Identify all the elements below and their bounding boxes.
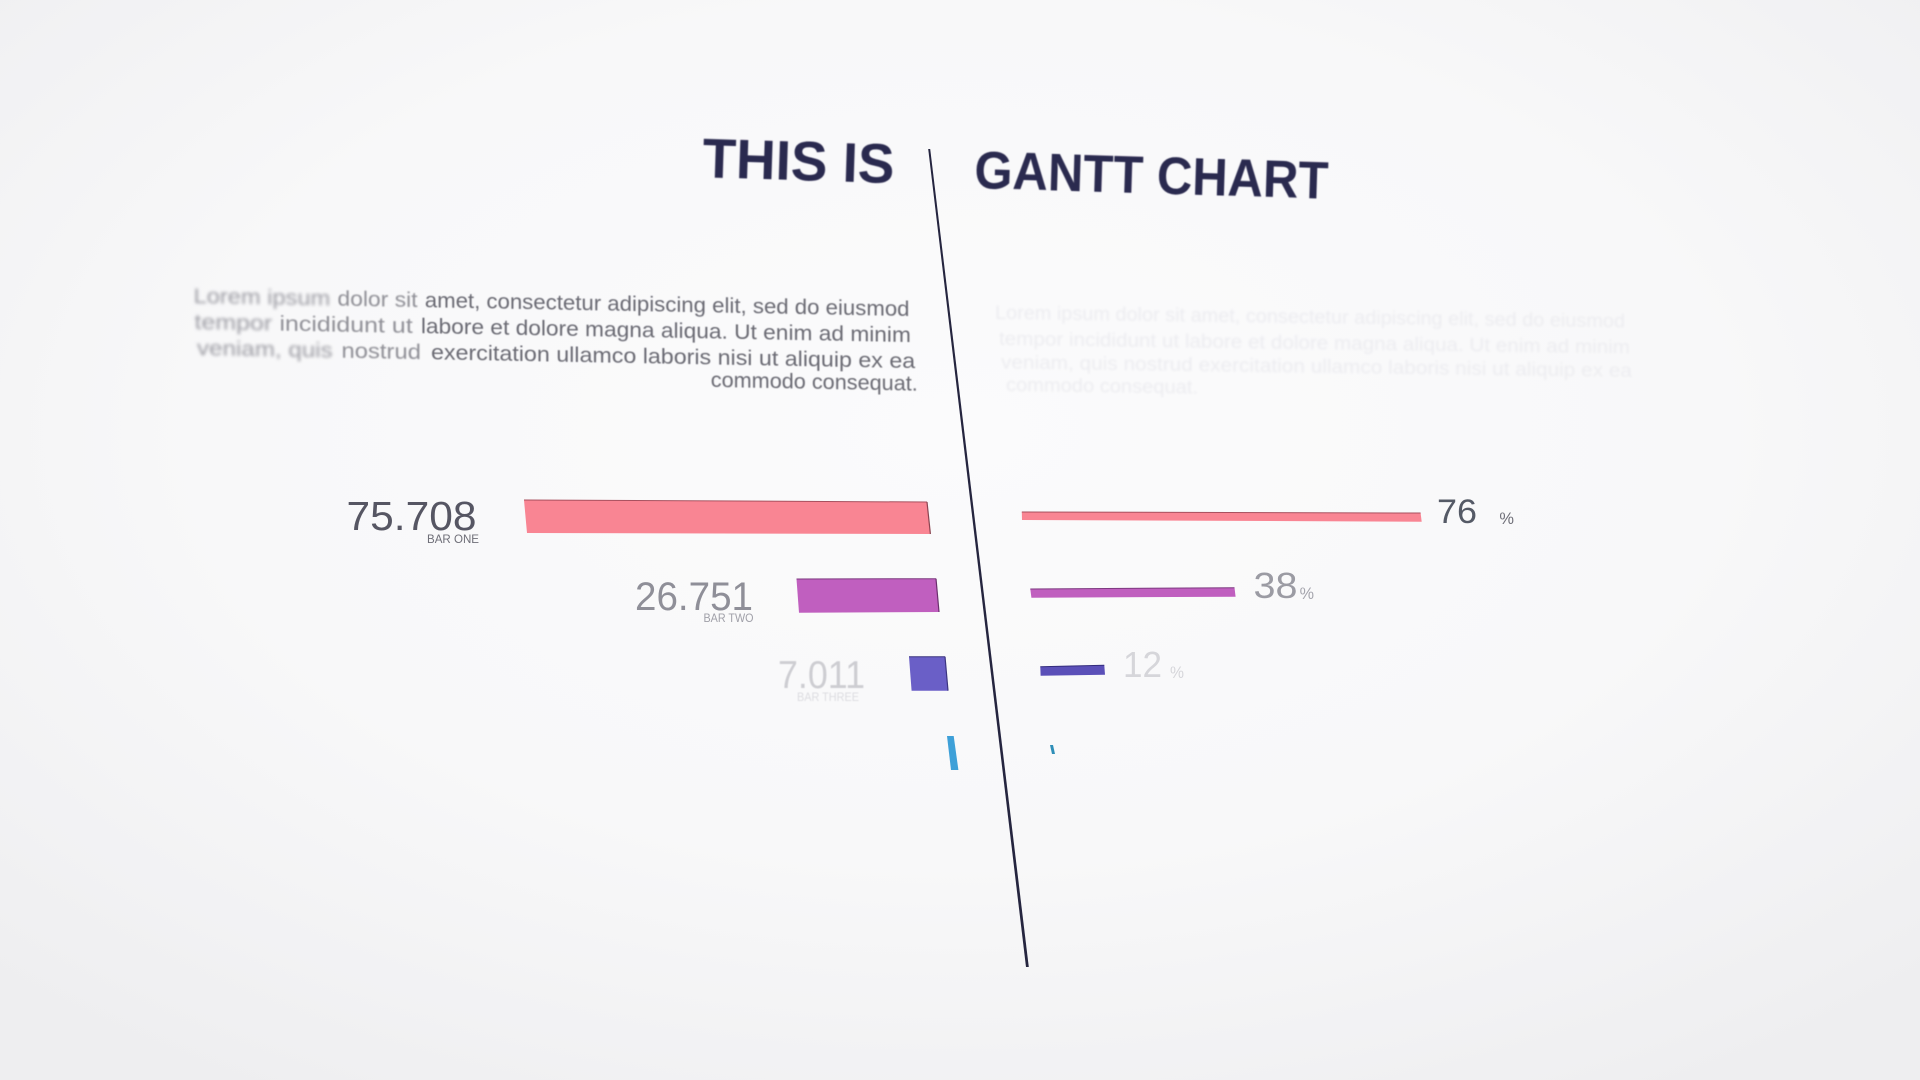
value: 12 percent: 12 [1123, 644, 1162, 685]
label: 7.011 bar three: BAR THREE [797, 690, 859, 704]
label: 7.011 bar three: 7.011 [778, 654, 865, 697]
right bar three [1040, 665, 1105, 676]
value: 12 percent: % [1170, 663, 1184, 682]
paragraph: left description: dolor sit [338, 288, 418, 312]
value: 38 percent: 38 [1254, 565, 1298, 606]
paragraph: right ghost description: veniam, quis nostrud exercitation ullamco laboris nisi ut aliquip ex ea [1001, 353, 1632, 382]
paragraph: left description: incididunt ut [279, 313, 413, 338]
paragraph: right ghost description: commodo consequat. [1006, 375, 1198, 399]
paragraph: left description: amet, consectetur adipiscing elit, sed do eiusmod [425, 289, 909, 321]
left bar one [524, 500, 930, 534]
value: 12 percent [1123, 644, 1184, 685]
label: 26.751 bar two: 26.751 [635, 575, 753, 619]
paragraph: left description: nostrud [341, 340, 421, 364]
paragraph: left description: labore et dolore magna aliqua. Ut enim ad minim [421, 315, 911, 347]
value: 76 percent: % [1499, 509, 1514, 528]
value: 76 percent [1437, 493, 1514, 531]
right bar four [1050, 745, 1055, 754]
right bar two [1030, 588, 1236, 598]
paragraph: right ghost description: tempor incididunt ut labore et dolore magna aliqua. Ut enim ad minim [999, 329, 1630, 359]
central divider line [928, 149, 1029, 967]
label: 75.708 bar one: 75.708 [346, 493, 476, 539]
paragraph: left description [194, 285, 918, 396]
left bar four [947, 736, 958, 770]
right bar one [1022, 512, 1422, 522]
paragraph: right ghost description [995, 303, 1632, 405]
left bar three [909, 657, 948, 691]
paragraph: left description: commodo consequat. [711, 369, 918, 396]
paragraph: left description: exercitation ullamco laboris nisi ut aliquip ex ea [431, 341, 916, 373]
title: left part: THIS IS [702, 126, 896, 195]
paragraph: left description: veniam, quis [197, 337, 333, 362]
value: 38 percent: % [1300, 584, 1314, 603]
paragraph: left description: Lorem ipsum [194, 285, 330, 311]
value: 38 percent [1254, 565, 1314, 606]
title: right part: GANTT CHART [974, 141, 1329, 211]
paragraph: right ghost description: Lorem ipsum dolor sit amet, consectetur adipiscing elit, sed do eiusmod [995, 303, 1625, 332]
value: 76 percent: 76 [1437, 493, 1477, 531]
paragraph: left description: tempor [194, 311, 272, 335]
label: 26.751 bar two: BAR TWO [704, 611, 754, 625]
label: 75.708 bar one: BAR ONE [427, 532, 479, 546]
left bar two [796, 579, 939, 613]
